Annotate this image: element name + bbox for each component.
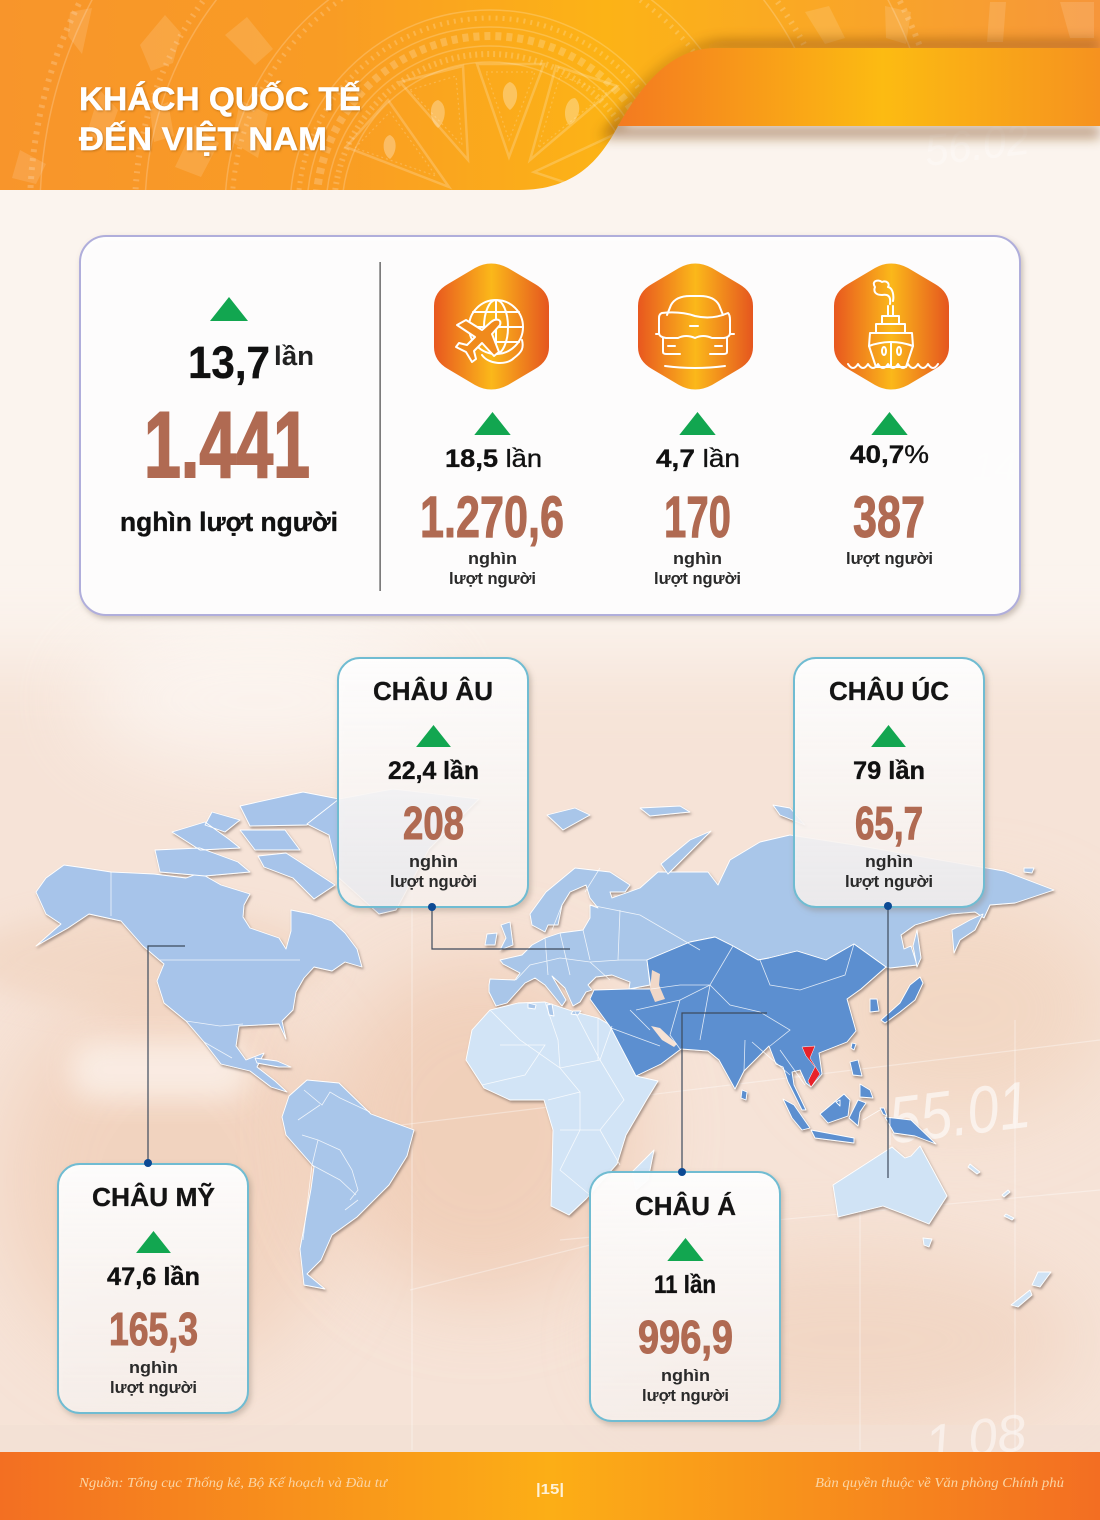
Tasmania and New Zealand xyxy=(923,1164,1051,1307)
Persian Gulf xyxy=(651,1026,677,1047)
connector: Asia xyxy=(678,1013,767,1176)
title xyxy=(79,81,361,157)
connector: Americas xyxy=(144,946,185,1167)
card: Americas: 47,6 lần xyxy=(107,1263,200,1291)
page number: |15| xyxy=(536,1481,564,1498)
card: Americas xyxy=(58,1164,248,1413)
card: Asia xyxy=(590,1172,780,1421)
card: Oceania: 79 lần xyxy=(853,757,925,785)
connector: Oceania xyxy=(884,902,892,1178)
world map xyxy=(36,789,1054,1307)
total arrivals xyxy=(120,297,338,537)
card: Oceania: 65,7 xyxy=(855,797,923,849)
card: Americas: 165,3 xyxy=(109,1303,198,1355)
road arrivals xyxy=(638,264,753,588)
card: Asia: lượt người xyxy=(642,1386,729,1405)
background numerals: 55.01 xyxy=(884,1067,1034,1157)
road arrivals: 4,7 lần xyxy=(656,445,740,473)
Africa xyxy=(466,1002,658,1215)
icon: car xyxy=(638,264,753,390)
card: Americas: CHÂU MỸ xyxy=(92,1182,215,1212)
background numerals: 14 xyxy=(972,445,1016,489)
card: Europe: CHÂU ÂU xyxy=(373,676,493,706)
card: Asia: nghìn xyxy=(661,1366,710,1385)
card: Europe: lượt người xyxy=(390,872,477,891)
card: Asia: CHÂU Á xyxy=(635,1191,736,1221)
card: Oceania: lượt người xyxy=(845,872,933,891)
Europe islands and Arctic xyxy=(485,805,805,1016)
South America xyxy=(282,1080,414,1289)
connector: Europe xyxy=(428,903,570,949)
card: Oceania: nghìn xyxy=(865,852,913,871)
card: Europe: 208 xyxy=(403,797,464,849)
background numerals: 56.02 xyxy=(922,115,1032,176)
background numerals xyxy=(884,115,1034,1474)
total arrivals: 13,7 xyxy=(188,337,270,388)
card: Americas: nghìn xyxy=(129,1358,178,1377)
card: Asia: 11 lần xyxy=(654,1271,716,1299)
sea arrivals xyxy=(834,264,949,568)
road arrivals: lượt người xyxy=(654,569,741,588)
background numerals: 1.08 xyxy=(922,1404,1029,1474)
card: Oceania xyxy=(794,658,984,907)
road arrivals: 170 xyxy=(664,485,731,550)
summary panel xyxy=(80,236,1020,615)
ribbon xyxy=(600,40,1100,138)
card: Europe xyxy=(338,658,528,907)
Asian islands xyxy=(741,977,936,1144)
Vietnam xyxy=(802,1046,820,1087)
icon: airplane and globe xyxy=(434,264,549,390)
icon: ship xyxy=(834,264,949,390)
card: Americas: lượt người xyxy=(110,1378,197,1397)
air arrivals xyxy=(420,264,564,588)
Caspian Sea xyxy=(650,970,665,1002)
source note: Nguồn: Tổng cục Thống kê, Bộ Kế hoạch và Đầu tư xyxy=(78,1476,388,1491)
air arrivals: 18,5 lần xyxy=(445,445,542,473)
road arrivals: nghìn xyxy=(673,549,722,568)
card: Asia: 996,9 xyxy=(638,1311,733,1363)
map internal borders xyxy=(111,868,890,1240)
Asia xyxy=(590,937,886,1110)
divider xyxy=(380,262,381,591)
sea arrivals: lượt người xyxy=(846,549,933,568)
total arrivals: nghìn lượt người xyxy=(120,507,338,537)
Australia xyxy=(833,1146,947,1224)
card: Europe: 22,4 lần xyxy=(388,757,479,785)
Europe and Russia xyxy=(489,835,1054,1006)
title: ĐẾN VIỆT NAM xyxy=(79,121,327,157)
Madagascar xyxy=(632,1150,654,1190)
footer xyxy=(0,1452,1100,1520)
air arrivals: lượt người xyxy=(449,569,536,588)
panel background xyxy=(80,236,1020,615)
card: Europe: nghìn xyxy=(409,852,458,871)
card: Oceania: CHÂU ÚC xyxy=(829,676,949,706)
air arrivals: nghìn xyxy=(468,549,517,568)
total arrivals: 1.441 xyxy=(144,392,310,497)
North America xyxy=(36,792,362,1092)
sea arrivals: 387 xyxy=(853,485,925,550)
Greenland xyxy=(307,789,479,914)
sea arrivals: 40,7% xyxy=(850,441,929,469)
header band xyxy=(0,0,1100,190)
Russian far-east islands xyxy=(913,868,1034,967)
air arrivals: 1.270,6 xyxy=(420,485,564,550)
copyright note: Bản quyền thuộc về Văn phòng Chính phủ xyxy=(815,1476,1064,1491)
title: KHÁCH QUỐC TẾ xyxy=(79,81,361,117)
total arrivals: lần xyxy=(274,341,314,371)
